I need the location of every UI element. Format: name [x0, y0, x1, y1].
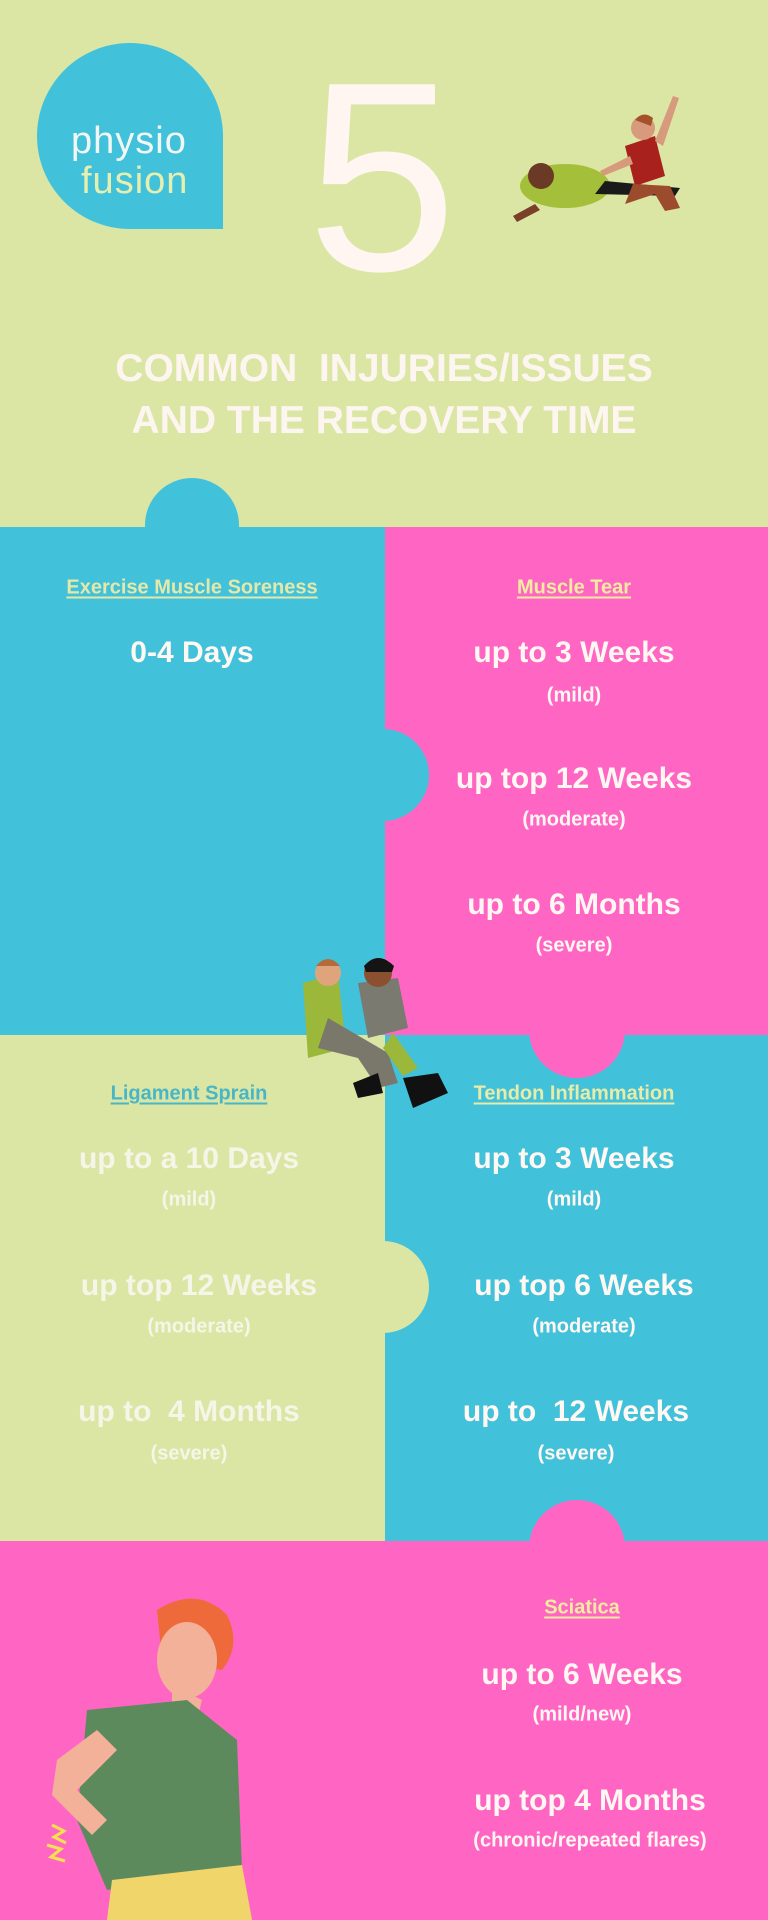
panel: muscle tear: (mild): [547, 684, 601, 706]
values: up to 3 Weeks: [473, 636, 675, 669]
tab: blue top: [145, 478, 239, 538]
heading: Tendon Inflammation: [474, 1082, 674, 1104]
panel: muscle tear: [385, 527, 768, 1035]
panel: ligament sprain: (moderate): [147, 1316, 251, 1338]
panel: ligament sprain: [0, 1035, 385, 1541]
panel: tendon inflammation: up top 6 Weeks: [474, 1269, 694, 1302]
panel: muscle tear: up top 12 Weeks: [456, 762, 692, 795]
illustration: ankle help: [303, 958, 448, 1108]
panel: sciatica: (mild/new): [533, 1704, 631, 1726]
illustration: man with back pain: [46, 1598, 252, 1920]
heading: Muscle Tear: [517, 576, 631, 598]
tab: green bump: [375, 1241, 429, 1333]
values: up to 3 Weeks: [473, 1142, 675, 1175]
panel: muscle tear: (moderate): [522, 808, 626, 830]
panel: sciatica: (chronic/repeated flares): [473, 1830, 707, 1852]
panel: tendon inflammation: [385, 1035, 768, 1541]
illustration: first aid: [513, 96, 680, 222]
heading: Ligament Sprain: [111, 1082, 267, 1104]
value: 0-4 Days: [130, 636, 254, 669]
panel: tendon inflammation: (moderate): [532, 1316, 636, 1338]
panel: tendon inflammation: up to 12 Weeks: [463, 1395, 689, 1428]
tab: pink top bump into tendon: [529, 1025, 625, 1078]
panel: tendon inflammation: (mild): [547, 1188, 601, 1210]
values: up to 6 Weeks: [481, 1658, 683, 1691]
logo text: physio: [71, 120, 187, 162]
panel: tendon inflammation: (severe): [538, 1442, 614, 1464]
logo text: [71, 120, 188, 202]
tab: pink bottom bump into sciatica: [529, 1500, 625, 1552]
panel: muscle tear: (severe): [536, 934, 612, 956]
title: AND THE RECOVERY TIME: [132, 399, 636, 442]
panel: ligament sprain: (severe): [151, 1442, 227, 1464]
panel: exercise muscle soreness: [0, 527, 385, 1035]
title: [115, 347, 653, 442]
panel: muscle tear: up to 6 Months: [467, 888, 681, 921]
values: up to a 10 Days: [79, 1142, 299, 1175]
panel: sciatica: up top 4 Months: [474, 1784, 706, 1817]
panel: ligament sprain: up top 12 Weeks: [81, 1269, 317, 1302]
panel: sciatica: [0, 1541, 768, 1920]
panel: ligament sprain: up to 4 Months: [78, 1395, 300, 1428]
tab: blue bump into muscle tear: [375, 729, 429, 821]
heading: Exercise Muscle Soreness: [66, 576, 318, 598]
panel: header: [0, 0, 768, 527]
panel: ligament sprain: (mild): [162, 1188, 216, 1210]
big number 5: 5: [307, 27, 457, 328]
logo: [37, 43, 223, 229]
heading: Sciatica: [544, 1596, 620, 1618]
title: COMMON INJURIES/ISSUES: [115, 347, 653, 390]
logo text: fusion: [81, 160, 188, 202]
